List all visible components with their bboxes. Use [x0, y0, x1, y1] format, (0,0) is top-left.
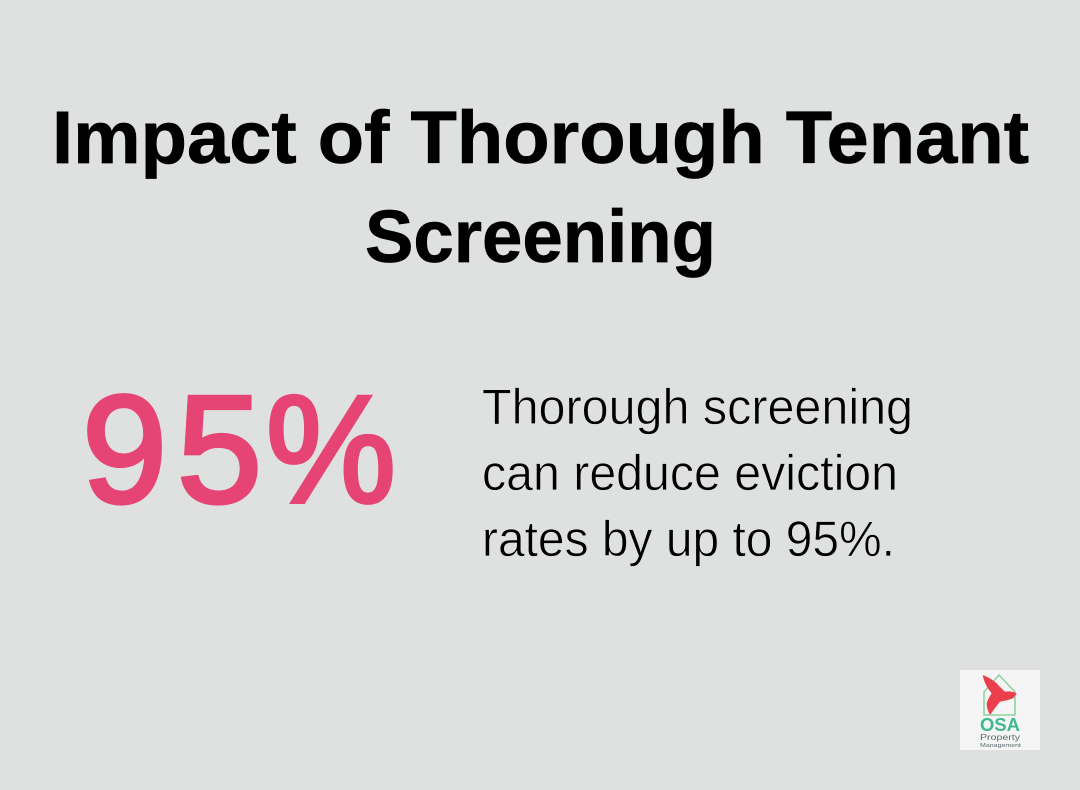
title: [52, 96, 1029, 278]
statistic description: [482, 379, 913, 567]
big statistic: 95%: %: [266, 364, 396, 535]
statistic description: can reduce eviction: [482, 445, 898, 501]
logo: OSA Property Management: Management: [980, 743, 1022, 749]
icon: house outline: [984, 675, 1015, 715]
title: Impact of Thorough Tenant: [52, 96, 1029, 179]
logo: OSA Property Management: [960, 670, 1040, 750]
big statistic: 95%: [82, 364, 396, 535]
icon: red bird: [983, 675, 1017, 715]
big statistic: 95%: 5: [177, 364, 262, 535]
statistic description: rates by up to 95%.: [482, 511, 895, 567]
statistic description: Thorough screening: [482, 379, 913, 435]
logo: OSA Property Management: Property: [980, 732, 1021, 742]
title: Screening: [365, 195, 716, 278]
logo wordmark: OSA: [980, 715, 1020, 735]
big statistic: 95%: 9: [82, 364, 167, 535]
